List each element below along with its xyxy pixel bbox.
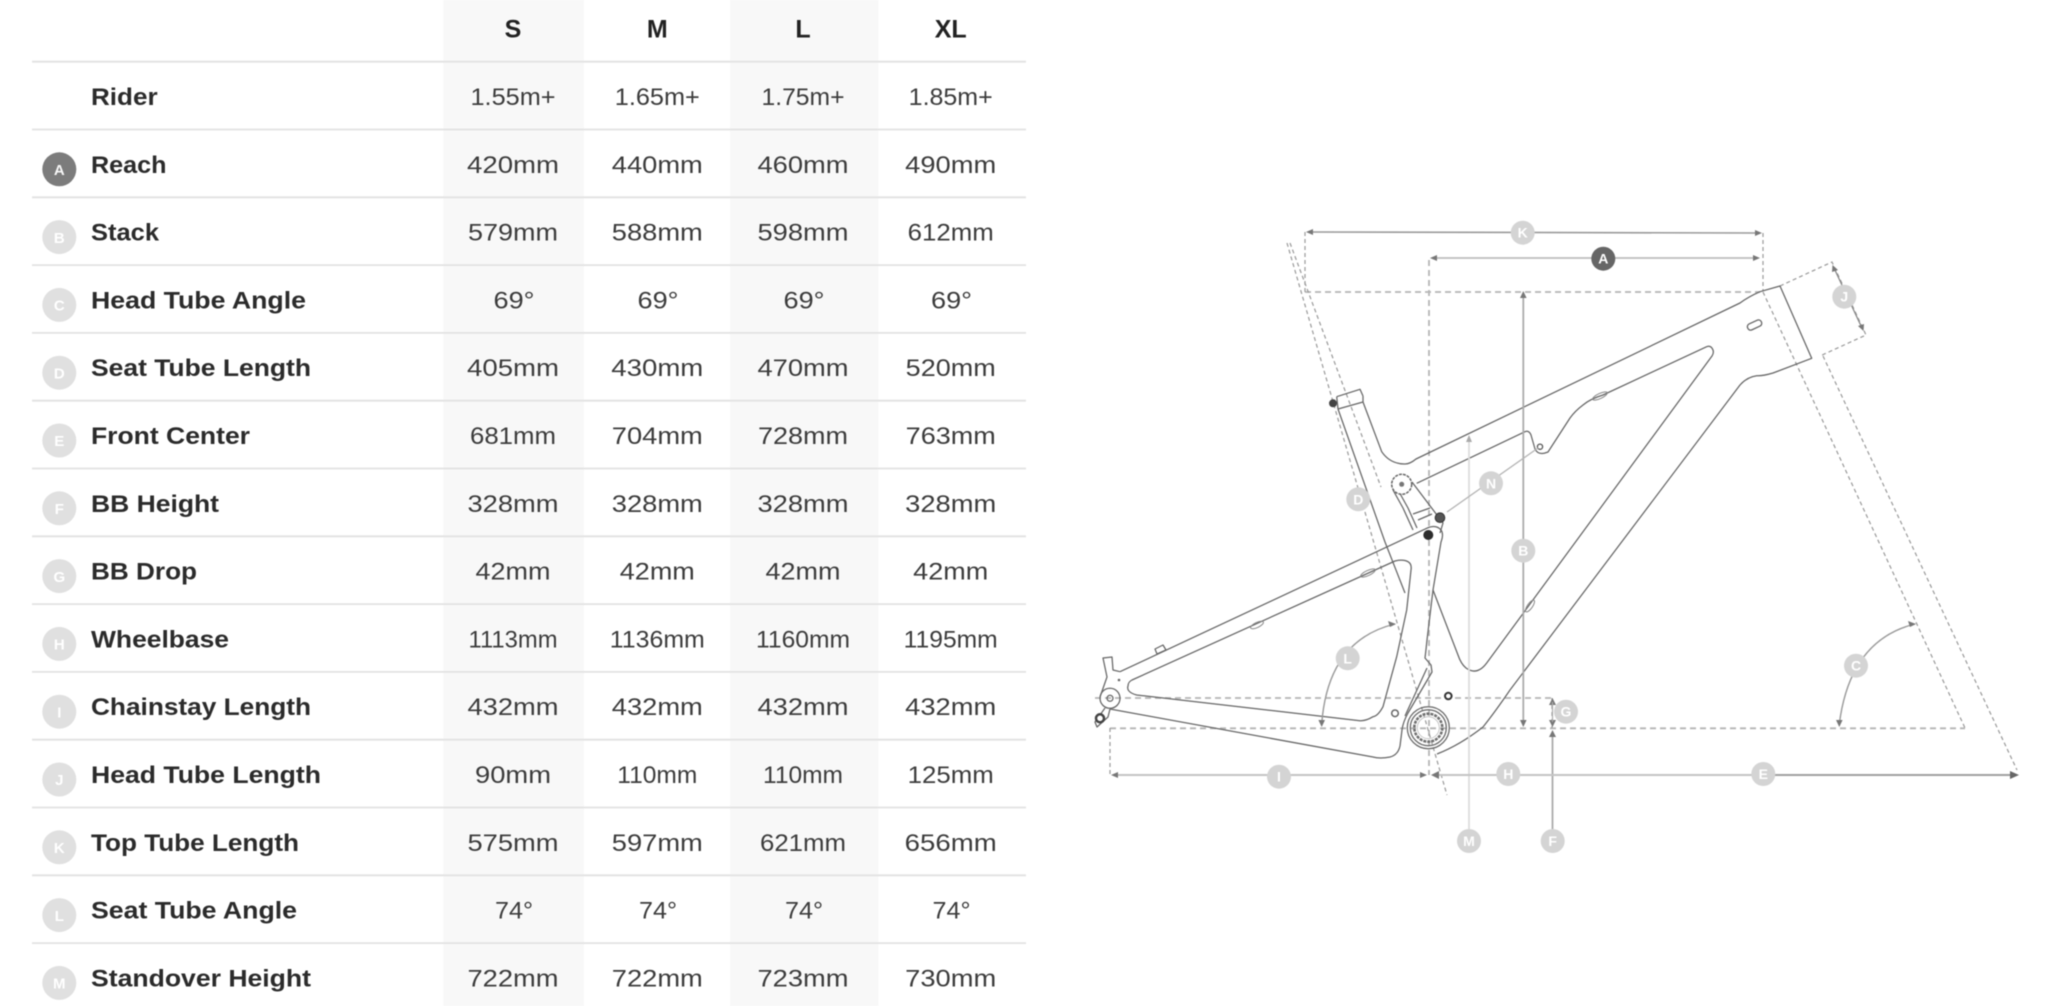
row: BB Height: 328mm <box>468 491 558 518</box>
row: Front Center: 763mm <box>906 423 996 450</box>
row: Head Tube Angle: C <box>54 298 65 315</box>
row: Wheelbase: 1195mm <box>904 626 998 653</box>
row: Reach: 490mm <box>905 152 996 179</box>
dashed construction lines <box>1095 232 2017 795</box>
row: Front Center: 681mm <box>470 423 556 450</box>
front triangle outer <box>1363 286 1812 754</box>
row: Head Tube Length: 110mm <box>617 762 697 789</box>
table column shading <box>443 0 878 1006</box>
row: Stack: 598mm <box>758 220 848 247</box>
dimension J: head tube length: J <box>1840 289 1848 305</box>
row: Seat Tube Length: 405mm <box>467 355 559 382</box>
dimension M: standover <box>1457 435 1481 853</box>
row: BB Height: F <box>55 501 64 518</box>
row: Stack: 612mm <box>908 220 994 247</box>
row: Chainstay Length: I <box>57 704 61 721</box>
row: Head Tube Length: 110mm <box>763 762 843 789</box>
row: Standover Height: Standover Height <box>91 965 311 992</box>
row: Front Center: Front Center <box>91 423 250 450</box>
row: Standover Height: 730mm <box>905 965 996 992</box>
row: Standover Height: 723mm <box>758 965 848 992</box>
row: Reach: A <box>54 162 65 179</box>
bottom bracket <box>1407 707 1449 749</box>
dimension C: head tube angle <box>1836 621 1916 727</box>
row: Reach: 440mm <box>612 152 703 179</box>
row: Top Tube Length: K <box>54 840 65 857</box>
rear triangle outer <box>1110 527 1442 758</box>
row: BB Height: 328mm <box>905 491 996 518</box>
dimension K: top tube length: K <box>1518 225 1528 241</box>
row: Rider: 1.55m+ <box>470 84 556 111</box>
row: Reach: 420mm <box>467 152 559 179</box>
dimension C: head tube angle: C <box>1851 658 1861 674</box>
row: BB Height: 328mm <box>758 491 848 518</box>
row: Stack: 579mm <box>468 220 558 247</box>
row: Head Tube Length: 125mm <box>908 762 994 789</box>
row: Seat Tube Angle: 74° <box>639 898 677 925</box>
row: Head Tube Angle: 69° <box>931 287 972 314</box>
row: Seat Tube Length: 470mm <box>758 355 848 382</box>
row: Standover Height <box>42 965 996 1000</box>
row: BB Drop: 42mm <box>766 559 840 586</box>
row: Wheelbase <box>42 626 998 661</box>
row: Front Center <box>42 423 996 458</box>
row: BB Drop <box>42 559 988 593</box>
row: Chainstay Length: 432mm <box>905 694 996 721</box>
row: Seat Tube Angle <box>42 898 971 932</box>
row: Wheelbase: 1113mm <box>468 626 558 653</box>
row: Seat Tube Angle: L <box>55 908 64 925</box>
row: Seat Tube Angle: 74° <box>932 898 970 925</box>
row: Front Center: E <box>54 433 64 450</box>
row: Stack: 588mm <box>612 220 703 247</box>
row: Head Tube Length: Head Tube Length <box>91 762 321 789</box>
dimension B: stack: B <box>1518 543 1528 559</box>
row: Standover Height: 722mm <box>612 965 703 992</box>
shock linkage <box>1393 482 1443 533</box>
row: BB Drop: BB Drop <box>91 559 197 586</box>
row: Rider: 1.85m+ <box>909 84 993 111</box>
row: Seat Tube Length <box>42 355 996 390</box>
dimension K: top tube length <box>1306 221 1762 245</box>
row: Stack: B <box>54 230 65 247</box>
bike frame line drawing <box>1095 286 1812 758</box>
row: Standover Height: M <box>53 976 66 993</box>
row: Chainstay Length: 432mm <box>758 694 848 721</box>
row: Seat Tube Length: D <box>54 365 65 382</box>
dimension E: front center: E <box>1759 766 1768 782</box>
row: Head Tube Angle: 69° <box>494 287 534 314</box>
dimension L: seat tube angle: L <box>1343 650 1352 666</box>
dimension J: head tube length <box>1832 265 1864 331</box>
row: BB Height: BB Height <box>91 491 219 518</box>
row: Reach: Reach <box>91 152 166 179</box>
rear triangle inner <box>1128 560 1411 721</box>
row: Wheelbase: 1136mm <box>610 626 705 653</box>
row: Seat Tube Length: 520mm <box>906 355 996 382</box>
row: Top Tube Length: 621mm <box>760 830 846 857</box>
row: Top Tube Length <box>42 830 997 864</box>
dimension G: BB drop: G <box>1561 704 1572 720</box>
row: Head Tube Angle: 69° <box>638 287 678 314</box>
dimension H: wheelbase: H <box>1503 766 1513 782</box>
dimension G: BB drop <box>1554 700 1578 724</box>
row: Seat Tube Angle: 74° <box>495 898 533 925</box>
dimension E: front center <box>1751 762 2019 786</box>
dimension D: seat tube length <box>1346 487 1370 511</box>
small fixtures <box>1392 710 1398 717</box>
row: Stack: Stack <box>91 220 160 247</box>
row: Wheelbase: 1160mm <box>756 626 850 653</box>
row: Seat Tube Length: 430mm <box>611 355 703 382</box>
row: Standover Height: 722mm <box>468 965 558 992</box>
row: Rider: 1.75m+ <box>762 84 844 111</box>
row: Wheelbase: Wheelbase <box>91 626 229 653</box>
row: Rider: 1.65m+ <box>615 84 700 111</box>
dimension B: stack <box>1511 291 1535 727</box>
table header: sizes: S <box>505 16 521 44</box>
row: Reach <box>42 152 996 186</box>
row: BB Height <box>42 491 996 525</box>
row: Front Center: 704mm <box>612 423 703 450</box>
row: Top Tube Length: Top Tube Length <box>91 830 299 857</box>
row: Stack <box>42 220 994 254</box>
row: Head Tube Angle <box>42 287 972 322</box>
dimension A: reach <box>1430 247 1760 271</box>
row: Chainstay Length: Chainstay Length <box>91 694 311 721</box>
row: Chainstay Length <box>42 694 996 729</box>
dimension L: seat tube angle <box>1318 621 1396 727</box>
row: Seat Tube Angle: Seat Tube Angle <box>91 898 297 925</box>
row: BB Drop: 42mm <box>476 559 550 586</box>
row: Chainstay Length: 432mm <box>468 694 558 721</box>
row: Top Tube Length: 575mm <box>468 830 558 857</box>
row: Rider <box>91 84 993 111</box>
dimension N: shock leader <box>1447 448 1538 512</box>
row: Front Center: 728mm <box>758 423 848 450</box>
row: Head Tube Length <box>42 762 994 796</box>
row: Wheelbase: H <box>54 637 65 654</box>
row: Head Tube Angle: Head Tube Angle <box>91 287 306 314</box>
dimension F: BB height: F <box>1548 833 1557 849</box>
dimension A: reach: A <box>1598 251 1608 267</box>
row: Chainstay Length: 432mm <box>612 694 703 721</box>
row: Head Tube Angle: 69° <box>784 287 824 314</box>
front triangle inner <box>1417 346 1713 671</box>
dimension N: shock leader: N <box>1486 475 1496 491</box>
row: BB Drop: 42mm <box>620 559 695 586</box>
dimension M: standover: M <box>1463 833 1475 849</box>
row: Seat Tube Angle: 74° <box>785 898 823 925</box>
dimension H: wheelbase <box>1431 762 1752 786</box>
row: Head Tube Length: J <box>55 772 63 789</box>
seat tube and collar <box>1337 389 1405 593</box>
dimension F: BB height <box>1541 698 1565 853</box>
dimension D: seat tube length: D <box>1353 491 1363 507</box>
row: Seat Tube Length: Seat Tube Length <box>91 355 311 382</box>
row: BB Drop: G <box>53 569 65 586</box>
dropout <box>1095 657 1427 727</box>
dimension I: chainstay length <box>1111 765 1427 789</box>
row: Top Tube Length: 597mm <box>612 830 703 857</box>
row: BB Drop: 42mm <box>913 559 988 586</box>
table header: sizes: L <box>795 16 811 44</box>
row: Reach: 460mm <box>758 152 848 179</box>
row: Head Tube Length: 90mm <box>475 762 551 789</box>
dimension I: chainstay length: I <box>1277 769 1281 785</box>
table header: sizes <box>505 16 967 44</box>
row: Top Tube Length: 656mm <box>905 830 997 857</box>
table header: sizes: XL <box>935 16 967 44</box>
row: Rider: Rider <box>91 84 158 111</box>
row: BB Height: 328mm <box>612 491 703 518</box>
table header: sizes: M <box>647 16 668 44</box>
